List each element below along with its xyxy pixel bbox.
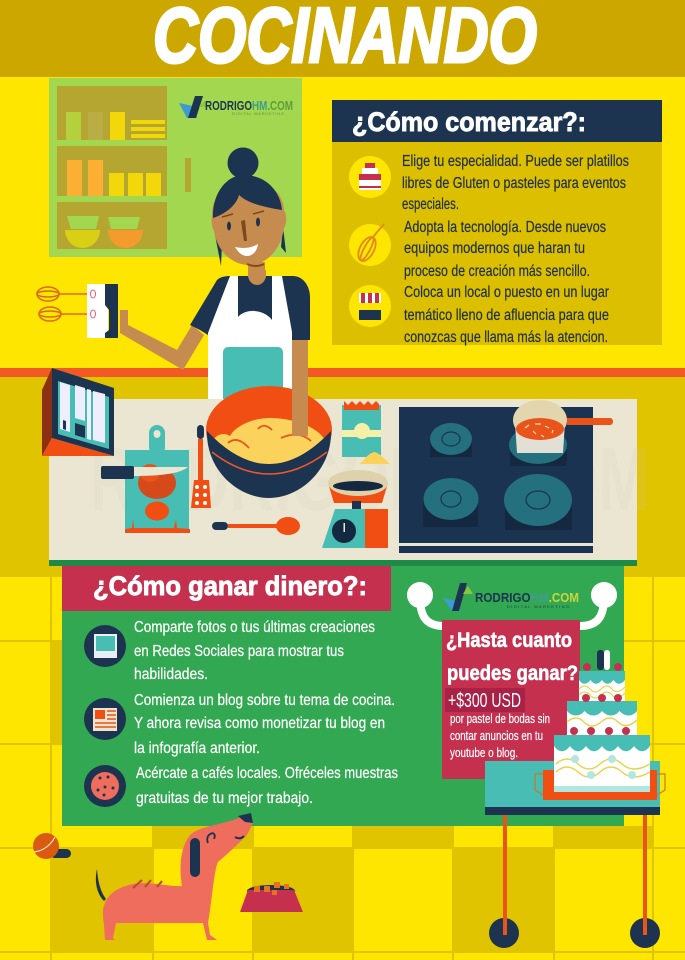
icon: shop stall <box>349 285 391 327</box>
orange wall stripe <box>0 368 685 377</box>
mixing bowl <box>206 378 332 498</box>
icon: cake <box>349 156 391 198</box>
callout: hasta cuanto puedes ganar <box>442 620 580 779</box>
callout: hasta cuanto puedes ganar: +$300 USD <box>448 690 521 712</box>
right arm <box>292 335 308 438</box>
text: como ganar dinero steps: Comienza un blog sobre tu tema de cocina. <box>134 692 395 709</box>
tablet <box>42 368 114 456</box>
dog food bowl <box>240 882 303 912</box>
kitchen scale <box>322 470 388 548</box>
callout: hasta cuanto puedes ganar: por pastel de bodas sin <box>450 711 550 726</box>
hair strands <box>215 226 286 266</box>
heading: como comenzar <box>332 100 662 142</box>
icon: cookie <box>84 765 126 807</box>
face <box>212 181 286 265</box>
callout: hasta cuanto puedes ganar: ¿Hasta cuanto <box>446 629 572 652</box>
text: como comenzar steps: especiales. <box>402 196 459 213</box>
logo: RodrigoHM top <box>179 96 293 118</box>
arm holding mixer <box>120 310 204 370</box>
neck <box>248 262 265 285</box>
logo: RodrigoHM lower: RODRIGOHM.COM <box>475 591 579 605</box>
text: como ganar dinero steps: Y ahora revisa como monetizar tu blog en <box>134 715 385 732</box>
text: como ganar dinero steps: gratuitas de tu mejor trabajo. <box>136 790 313 807</box>
heading: como ganar dinero: ¿Cómo ganar dinero?: <box>93 571 367 601</box>
back wall lower band <box>0 377 685 577</box>
text: como comenzar steps: libres de Gluten o pasteles para eventos <box>402 175 626 192</box>
floor tiles background <box>0 577 685 960</box>
shirt <box>190 276 310 340</box>
bun <box>228 148 258 178</box>
text: como ganar dinero steps: Comparte fotos o tus últimas creaciones <box>134 619 375 636</box>
text: como ganar dinero steps: habilidades. <box>134 666 208 683</box>
apron pocket <box>223 347 283 403</box>
text: como ganar dinero steps: la infografía anterior. <box>134 740 260 757</box>
text: como comenzar steps: Adopta la tecnología. Desde nuevos <box>404 219 606 236</box>
facial features <box>222 211 264 256</box>
logo: RodrigoHM lower: DIGITAL MARKETING <box>507 604 569 609</box>
kitchen cabinet <box>49 78 302 257</box>
icon: newspaper <box>84 698 126 740</box>
flour packet <box>342 401 390 464</box>
text: como comenzar steps: conozcas que llama más la atencion. <box>404 329 608 346</box>
spoon <box>212 517 300 535</box>
spatula <box>191 425 211 508</box>
hand mixer <box>37 284 118 338</box>
text: como comenzar steps <box>402 153 629 346</box>
hair <box>213 175 282 218</box>
cook character <box>120 148 310 438</box>
text: como comenzar steps: equipos modernos que haran tu <box>404 240 585 257</box>
dog <box>96 813 253 940</box>
callout: hasta cuanto puedes ganar: youtube o blog. <box>450 745 518 760</box>
wedding cake <box>554 650 650 792</box>
saucepan <box>513 400 613 453</box>
text: como comenzar steps: Coloca un local o puesto en un lugar <box>404 284 610 301</box>
callout: hasta cuanto puedes ganar: puedes ganar? <box>447 662 578 685</box>
text: como comenzar steps: temático lleno de afluencia para que <box>404 307 609 324</box>
logo: RodrigoHM lower <box>443 583 579 611</box>
icon: whisk <box>349 224 391 266</box>
text: como comenzar steps: Elige tu especialidad. Puede ser platillos <box>402 153 629 170</box>
cutting board with knife <box>101 425 190 533</box>
text: como ganar dinero steps: en Redes Sociales para mostrar tus <box>134 643 344 660</box>
panel: como comenzar <box>332 100 662 346</box>
logo: RodrigoHM top: DIGITAL MARKETING <box>232 111 284 116</box>
serving cart <box>485 761 665 948</box>
text: como ganar dinero steps: Acércate a cafés locales. Ofréceles muestras <box>136 765 398 782</box>
icon: photo <box>84 625 126 667</box>
heading: como ganar dinero <box>62 566 391 611</box>
stove top <box>399 407 593 553</box>
heading: como comenzar: ¿Cómo comenzar?: <box>352 107 586 137</box>
kitchen counter <box>49 399 650 566</box>
dog ball <box>33 833 71 859</box>
cart handles <box>411 586 613 626</box>
text: como ganar dinero steps <box>134 619 398 807</box>
logo: RodrigoHM top: RODRIGOHM.COM <box>205 99 293 113</box>
callout: hasta cuanto puedes ganar: contar anuncios en tu <box>450 728 543 743</box>
panel: como ganar dinero <box>62 566 624 826</box>
apron <box>208 276 292 420</box>
text: como comenzar steps: proceso de creación más sencillo. <box>404 263 590 280</box>
